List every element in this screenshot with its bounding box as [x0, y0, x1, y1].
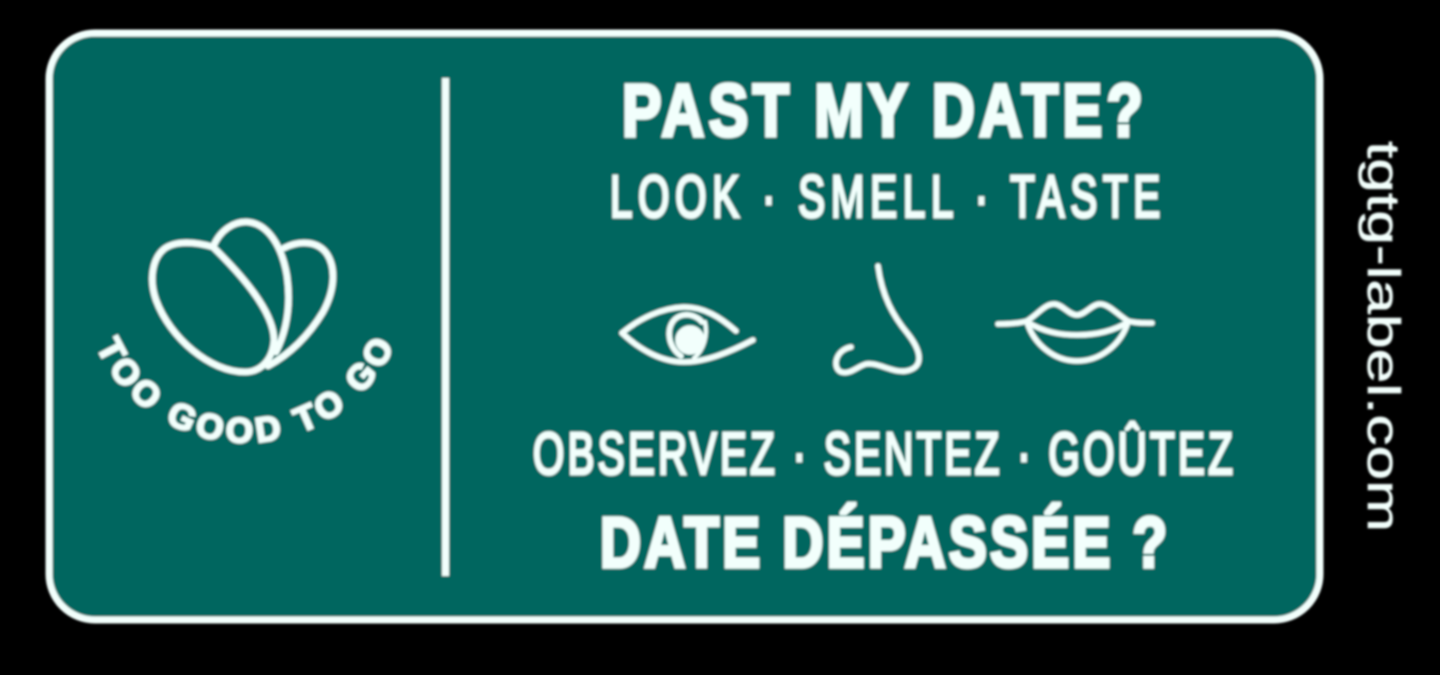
heading: Past my date: PAST MY DATE?: [622, 70, 1143, 153]
subheading: look smell taste: LOOK · SMELL · TASTE: [610, 163, 1160, 230]
icon: eye: [622, 307, 753, 362]
icon: lips: [998, 304, 1152, 361]
icon: Too Good To Go logo: [152, 222, 333, 372]
heading: date depassee: DATE DÉPASSÉE ?: [600, 503, 1167, 582]
panel: green label: [49, 33, 1320, 620]
subheading: observez sentez goutez: OBSERVEZ · SENTEZ · GOÛTEZ: [533, 420, 1233, 487]
website label: tgtg-label.com: [1358, 141, 1409, 532]
icon: nose: [836, 266, 919, 373]
logo wordmark: TOO GOOD TO GO: [96, 332, 394, 446]
divider: [442, 78, 449, 576]
